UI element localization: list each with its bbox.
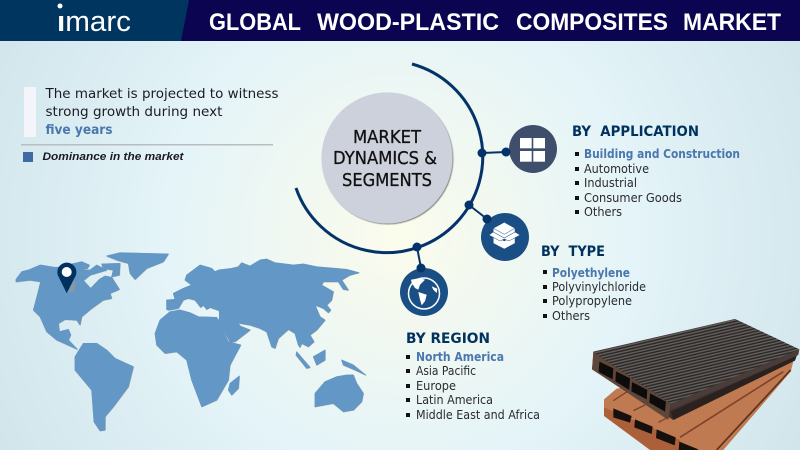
panel: by region: Asia Pacific [416,364,476,378]
central disc: market dynamics and segments: MARKET [353,127,422,148]
icon: application grid [502,125,557,173]
icon: region globe [400,264,448,316]
lower board [604,362,793,450]
panel: by application: Building and Construction [584,147,740,161]
panel: by application: BY APPLICATION [572,124,699,140]
title: WOOD-PLASTIC [317,9,499,36]
panel: by type: Others [552,309,590,323]
panel: by type: Polyethylene [552,266,630,280]
Arctic islands [72,262,120,277]
Madagascar [228,376,239,395]
panel: by type: BY TYPE [541,244,605,260]
callout: market growth: strong growth during next [46,104,222,120]
panel: by region: Europe [416,379,456,393]
panel: by type [541,244,646,323]
header banner [0,0,800,41]
panel: by region: Middle East and Africa [416,408,540,422]
title: COMPOSITES [516,9,668,36]
logo: imarc: ımarc [57,6,131,38]
panel: by type: Polypropylene [552,294,632,308]
connector: region [413,243,421,268]
panel: by region [406,331,540,422]
title [209,9,781,36]
connector: type [465,201,487,219]
title: GLOBAL [209,9,301,36]
title: MARKET [683,9,781,36]
callout: market growth: The market is projected to witness [45,86,278,102]
North America [16,265,119,349]
central disc: market dynamics and segments [322,92,452,224]
upper board [592,319,799,420]
product image: composite deck boards [592,319,799,450]
Indonesia and New Guinea [296,350,366,375]
map pin: North America [57,263,76,293]
icon: type box [481,213,529,261]
Africa [155,310,241,407]
panel: by region: North America [416,350,504,364]
world map [16,253,366,431]
callout: market growth: five years [46,122,112,138]
panel: by application [572,124,740,219]
connector: application [478,149,506,157]
panel: by type: Polyvinylchloride [552,280,646,294]
panel: by application: Industrial [584,176,637,190]
central arc [296,64,483,253]
panel: by application: Consumer Goods [584,191,682,205]
panel: by application: Automotive [584,162,649,176]
Eurasia [167,259,359,348]
divider and dominance legend [21,144,273,163]
central disc: market dynamics and segments: SEGMENTS [342,170,432,191]
central disc: market dynamics and segments: DYNAMICS & [333,148,437,169]
panel: by region: Latin America [416,393,493,407]
callout: market growth [24,86,278,138]
panel: by region: BY REGION [406,331,490,347]
divider and dominance legend: Dominance in the market [42,151,185,163]
Greenland [107,253,168,279]
panel: by application: Others [584,205,622,219]
Australia [315,375,363,412]
South America [75,343,133,431]
